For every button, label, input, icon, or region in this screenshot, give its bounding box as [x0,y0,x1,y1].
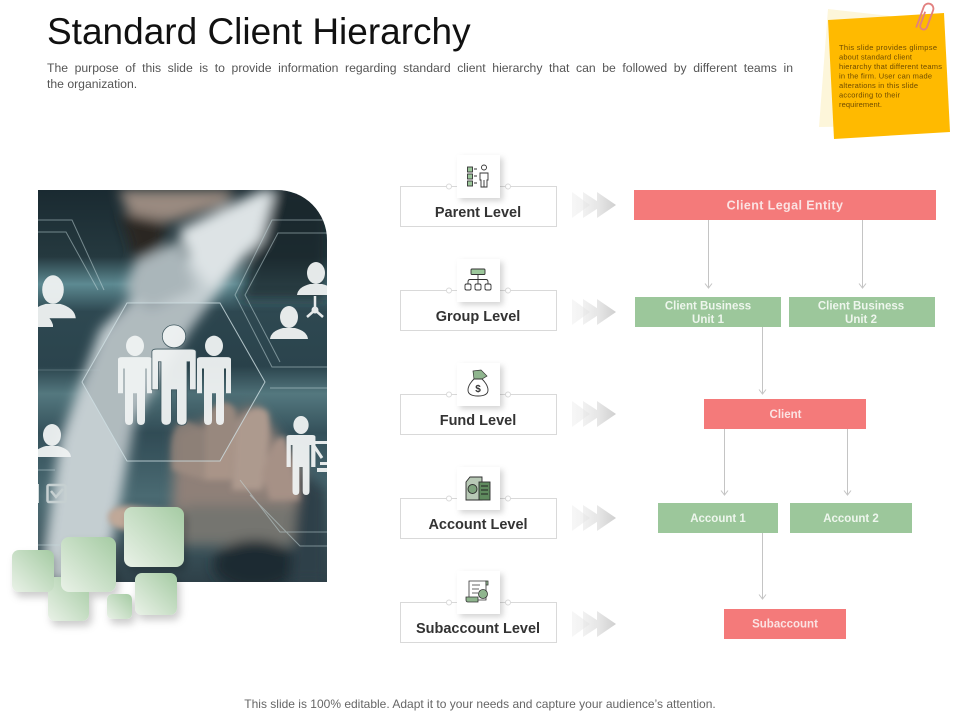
level: Parent Level [400,155,556,226]
level: Parent Level: Parent Level [435,205,521,221]
collar [178,190,275,290]
level: Subaccount Level: Subaccount Level [416,621,540,637]
node: Client Legal Entity: Client Legal Entity [727,198,843,212]
subtitle paragraph: the organization. [47,77,137,91]
people icons [30,262,335,495]
belt shadow [213,540,297,590]
photo: businessman touching hexagon people icons [30,190,335,590]
node: Account 1: Account 1 [690,513,746,525]
level: Fund Level: Fund Level [440,413,516,429]
hexagon outline [82,303,265,461]
footer note: This slide is 100% editable. Adapt it to your needs and capture your audience’s attention. [244,697,716,711]
shirt band [40,250,250,582]
node: Account 2: Account 2 [823,513,879,525]
sticky note [819,2,950,139]
node: Client Business Unit 2 [789,297,935,327]
icon: money bag [468,370,488,396]
decorative green squares [12,507,184,621]
node: Client Business Unit 1 [635,297,781,327]
note text: hierarchy that different teams [839,62,942,71]
chin and neck [118,190,235,222]
level: Account Level: Account Level [428,517,528,533]
level: Group Level: Group Level [436,309,520,325]
icon: checklist person [468,165,488,187]
note text [839,43,942,109]
note backing sheet [819,9,943,127]
note text: alterations in this slide [839,81,918,90]
arrows: chevrons row 5 [572,611,616,637]
node: Subaccount: Subaccount [752,618,818,630]
arrows: chevrons row 3 [572,401,616,427]
hand [166,401,312,515]
note text: requirement. [839,100,882,109]
node: Client Business Unit 2: Unit 2 [845,314,877,326]
node: Account 2 [790,503,912,533]
node: Account 1 [658,503,778,533]
note front [828,13,950,139]
paperclip icon [916,2,935,31]
level: Account Level [400,467,556,538]
level: Subaccount Level [400,571,556,642]
note text: according to their [839,90,900,100]
subtitle paragraph: The purpose of this slide is to provide information regarding standard client hierarchy that can be followed by different teams in [47,61,793,75]
check box icon [48,485,66,502]
hierarchy connectors [705,220,866,599]
icon: org chart [465,269,491,290]
icon: invoice and calculator [466,477,490,500]
node: Client [704,399,866,429]
title: Standard Client Hierarchy [47,11,471,52]
node: Client Business Unit 2: Client Business [818,300,904,312]
level: Group Level [400,259,556,330]
node: Subaccount [724,609,846,639]
node: Client Business Unit 1: Unit 1 [692,314,725,326]
suit dark right [240,190,327,300]
note text: in the firm. User can made [839,72,932,80]
node: Client Business Unit 1: Client Business [665,300,751,312]
arrows: chevrons row 2 [572,299,616,325]
note text: about standard client [839,52,913,62]
icon: money bag: $ [475,384,481,395]
icon: scroll receipt [466,581,488,602]
note text: This slide provides glimpse [839,43,937,52]
level: Fund Level [400,363,556,434]
subtitle paragraph [47,61,793,91]
arrows: chevrons row 1 [572,192,616,218]
node: Client Legal Entity [634,190,936,220]
arrows: chevrons row 4 [572,505,616,531]
node: Client: Client [770,409,802,421]
